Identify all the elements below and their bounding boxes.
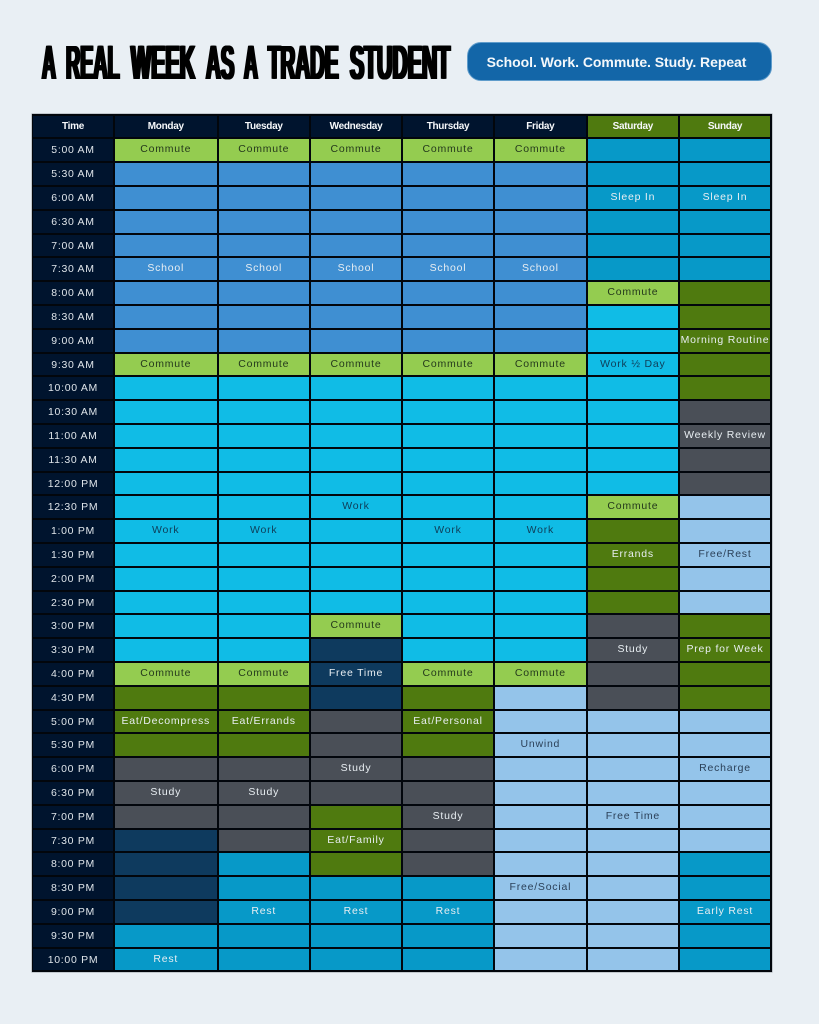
row: 9:30 AM: Commute (140, 358, 191, 370)
row: 11:00 AM (33, 425, 770, 447)
row: 9:00 AM (33, 330, 770, 352)
row: 5:00 AM: Commute (238, 143, 289, 155)
row: 8:00 AM: 8:00 AM (51, 287, 95, 299)
header row: Tuesday (245, 121, 283, 132)
row: 6:00 PM: 6:00 PM (51, 763, 95, 775)
row: 6:30 AM (33, 211, 770, 233)
title: STUDENT (350, 37, 450, 90)
row: 10:00 AM: 10:00 AM (48, 382, 98, 394)
header row: Friday (526, 121, 554, 132)
row: 4:00 PM: Commute (515, 667, 566, 679)
header row: Thursday (427, 121, 469, 132)
weekly schedule table (32, 114, 772, 972)
row: 8:30 PM (33, 877, 770, 899)
row: 4:00 PM: Commute (422, 667, 473, 679)
title (41, 37, 452, 90)
row: 6:00 AM: Sleep In (610, 191, 655, 203)
row: 1:30 PM: Errands (612, 548, 654, 560)
row: 5:00 AM: Commute (422, 143, 473, 155)
row: 6:30 PM: 6:30 PM (51, 787, 95, 799)
row: 1:30 PM (33, 544, 770, 566)
row: 5:30 AM (33, 163, 770, 185)
row: 6:00 PM (33, 758, 770, 780)
row: 7:30 AM (33, 258, 770, 280)
tagline pill: School. Work. Commute. Study. Repeat (487, 54, 746, 70)
row: 3:30 PM: Prep for Week (686, 643, 764, 655)
row: 8:00 PM: 8:00 PM (51, 858, 95, 870)
row: 7:30 PM: 7:30 PM (51, 835, 95, 847)
row: 8:00 PM (33, 853, 770, 875)
title: WEEK (130, 37, 195, 90)
row: 9:30 PM: 9:30 PM (51, 930, 95, 942)
row: 6:30 AM: 6:30 AM (51, 216, 95, 228)
row: 1:00 PM: Work (434, 524, 462, 536)
row: 7:30 AM: School (338, 262, 374, 274)
row: 5:00 AM: Commute (140, 143, 191, 155)
row: 9:00 PM: Rest (436, 905, 460, 917)
row: 5:00 PM: Eat/Personal (413, 715, 483, 727)
row: 6:30 PM: Study (248, 786, 279, 798)
row: 1:00 PM: Work (527, 524, 554, 536)
row: 5:00 AM: 5:00 AM (51, 144, 95, 156)
row: 9:00 AM: Morning Routine (681, 334, 769, 346)
row: 5:00 AM (33, 139, 770, 161)
row: 6:00 PM: Study (341, 762, 371, 774)
row: 10:30 AM: 10:30 AM (48, 406, 98, 418)
title: AS (206, 37, 234, 90)
row: 3:30 PM: 3:30 PM (51, 644, 95, 656)
row: 9:30 AM: Commute (238, 358, 289, 370)
row: 10:30 AM (33, 401, 770, 423)
row: 7:00 AM: 7:00 AM (51, 240, 95, 252)
row: 6:00 AM: 6:00 AM (51, 192, 95, 204)
row: 3:30 PM: Study (617, 643, 648, 655)
row: 7:30 AM: School (147, 262, 184, 274)
row: 12:00 PM (33, 473, 770, 494)
title: TRADE (268, 37, 338, 90)
row: 3:30 PM (33, 639, 770, 661)
row: 9:00 PM: Rest (344, 905, 368, 917)
title: REAL (66, 37, 120, 90)
row: 3:00 PM (33, 615, 770, 637)
row: 6:00 PM: Recharge (699, 762, 751, 774)
row: 5:00 PM: 5:00 PM (51, 716, 95, 728)
row: 9:00 AM: 9:00 AM (51, 335, 95, 347)
row: 5:30 AM: 5:30 AM (51, 168, 95, 180)
row: 2:30 PM: 2:30 PM (51, 597, 95, 609)
title: A (42, 37, 56, 90)
header row: Monday (148, 121, 184, 132)
row: 9:00 PM: Early Rest (697, 905, 753, 917)
row: 10:00 PM (33, 949, 770, 970)
row: 8:00 AM: Commute (607, 286, 658, 298)
row: 11:00 AM: Weekly Review (684, 429, 766, 441)
row: 12:30 PM: 12:30 PM (48, 501, 98, 513)
row: 12:30 PM (33, 496, 770, 518)
row: 9:30 AM (33, 354, 770, 375)
row: 7:00 PM (33, 806, 770, 828)
row: 8:00 AM (33, 282, 770, 304)
row: 1:00 PM (33, 520, 770, 542)
row: 6:00 AM: Sleep In (703, 191, 747, 203)
header row (33, 116, 770, 137)
row: 2:00 PM (33, 568, 770, 590)
row: 5:30 PM (33, 734, 770, 756)
row: 9:30 AM: Work ½ Day (600, 358, 666, 370)
row: 8:30 PM: Free/Social (510, 881, 571, 893)
row: 7:00 PM: 7:00 PM (51, 811, 95, 823)
row: 7:30 AM: School (245, 262, 282, 274)
row: 10:00 PM: 10:00 PM (48, 954, 98, 966)
row: 9:30 PM (33, 925, 770, 947)
row: 3:00 PM: Commute (330, 619, 381, 631)
row: 1:00 PM: 1:00 PM (51, 525, 95, 537)
title: A (244, 37, 258, 90)
row: 5:30 PM: 5:30 PM (51, 739, 95, 751)
header row: Wednesday (330, 121, 382, 132)
row: 2:00 PM: 2:00 PM (51, 573, 95, 585)
row: 7:30 AM: School (430, 262, 466, 274)
row: 9:30 AM: Commute (515, 358, 566, 370)
row: 9:00 PM: 9:00 PM (51, 906, 95, 918)
header row: Saturday (613, 121, 653, 132)
header row: Sunday (708, 121, 742, 132)
header row: Time (62, 121, 84, 132)
row: 10:00 AM (33, 377, 770, 399)
row: 4:00 PM (33, 663, 770, 685)
row: 9:30 AM: Commute (422, 358, 473, 370)
row: 1:00 PM: Work (250, 524, 277, 536)
row: 12:00 PM: 12:00 PM (48, 478, 98, 490)
row: 11:30 AM: 11:30 AM (48, 454, 98, 466)
row: 8:30 AM (33, 306, 770, 328)
row: 1:00 PM: Work (152, 524, 179, 536)
row: 9:30 AM: 9:30 AM (51, 359, 95, 371)
row: 4:00 PM: Free Time (329, 667, 383, 679)
row: 9:00 PM: Rest (251, 905, 276, 917)
row: 6:30 PM: Study (150, 786, 181, 798)
row: 5:00 AM: Commute (330, 143, 381, 155)
row: 5:00 AM: Commute (515, 143, 566, 155)
row: 1:30 PM: Free/Rest (698, 548, 752, 560)
row: 4:00 PM: Commute (238, 667, 289, 679)
row: 5:00 PM: Eat/Errands (232, 715, 296, 727)
row: 7:00 PM: Study (433, 810, 463, 822)
row: 9:00 PM (33, 901, 770, 923)
row: 7:30 AM: 7:30 AM (51, 263, 95, 275)
row: 7:00 AM (33, 235, 770, 256)
row: 11:30 AM (33, 449, 770, 471)
row: 8:30 AM: 8:30 AM (51, 311, 95, 323)
row: 3:00 PM: 3:00 PM (51, 620, 95, 632)
row: 7:30 AM: School (522, 262, 559, 274)
row: 6:00 AM (33, 187, 770, 209)
row: 4:00 PM: 4:00 PM (51, 668, 95, 680)
tagline pill (467, 42, 772, 81)
row: 5:30 PM: Unwind (520, 738, 560, 750)
row: 11:00 AM: 11:00 AM (48, 430, 98, 442)
row: 5:00 PM: Eat/Decompress (121, 715, 210, 727)
row: 12:30 PM: Work (342, 500, 370, 512)
row: 4:30 PM: 4:30 PM (51, 692, 95, 704)
row: 4:00 PM: Commute (140, 667, 191, 679)
row: 6:30 PM (33, 782, 770, 804)
row: 4:30 PM (33, 687, 770, 709)
row: 5:00 PM (33, 711, 770, 732)
row: 12:30 PM: Commute (607, 500, 658, 512)
row: 7:00 PM: Free Time (606, 810, 660, 822)
row: 2:30 PM (33, 592, 770, 613)
row: 9:30 AM: Commute (330, 358, 381, 370)
row: 8:30 PM: 8:30 PM (51, 882, 95, 894)
row: 10:00 PM: Rest (153, 953, 178, 965)
row: 1:30 PM: 1:30 PM (51, 549, 95, 561)
row: 7:30 PM (33, 830, 770, 851)
row: 7:30 PM: Eat/Family (327, 834, 385, 846)
